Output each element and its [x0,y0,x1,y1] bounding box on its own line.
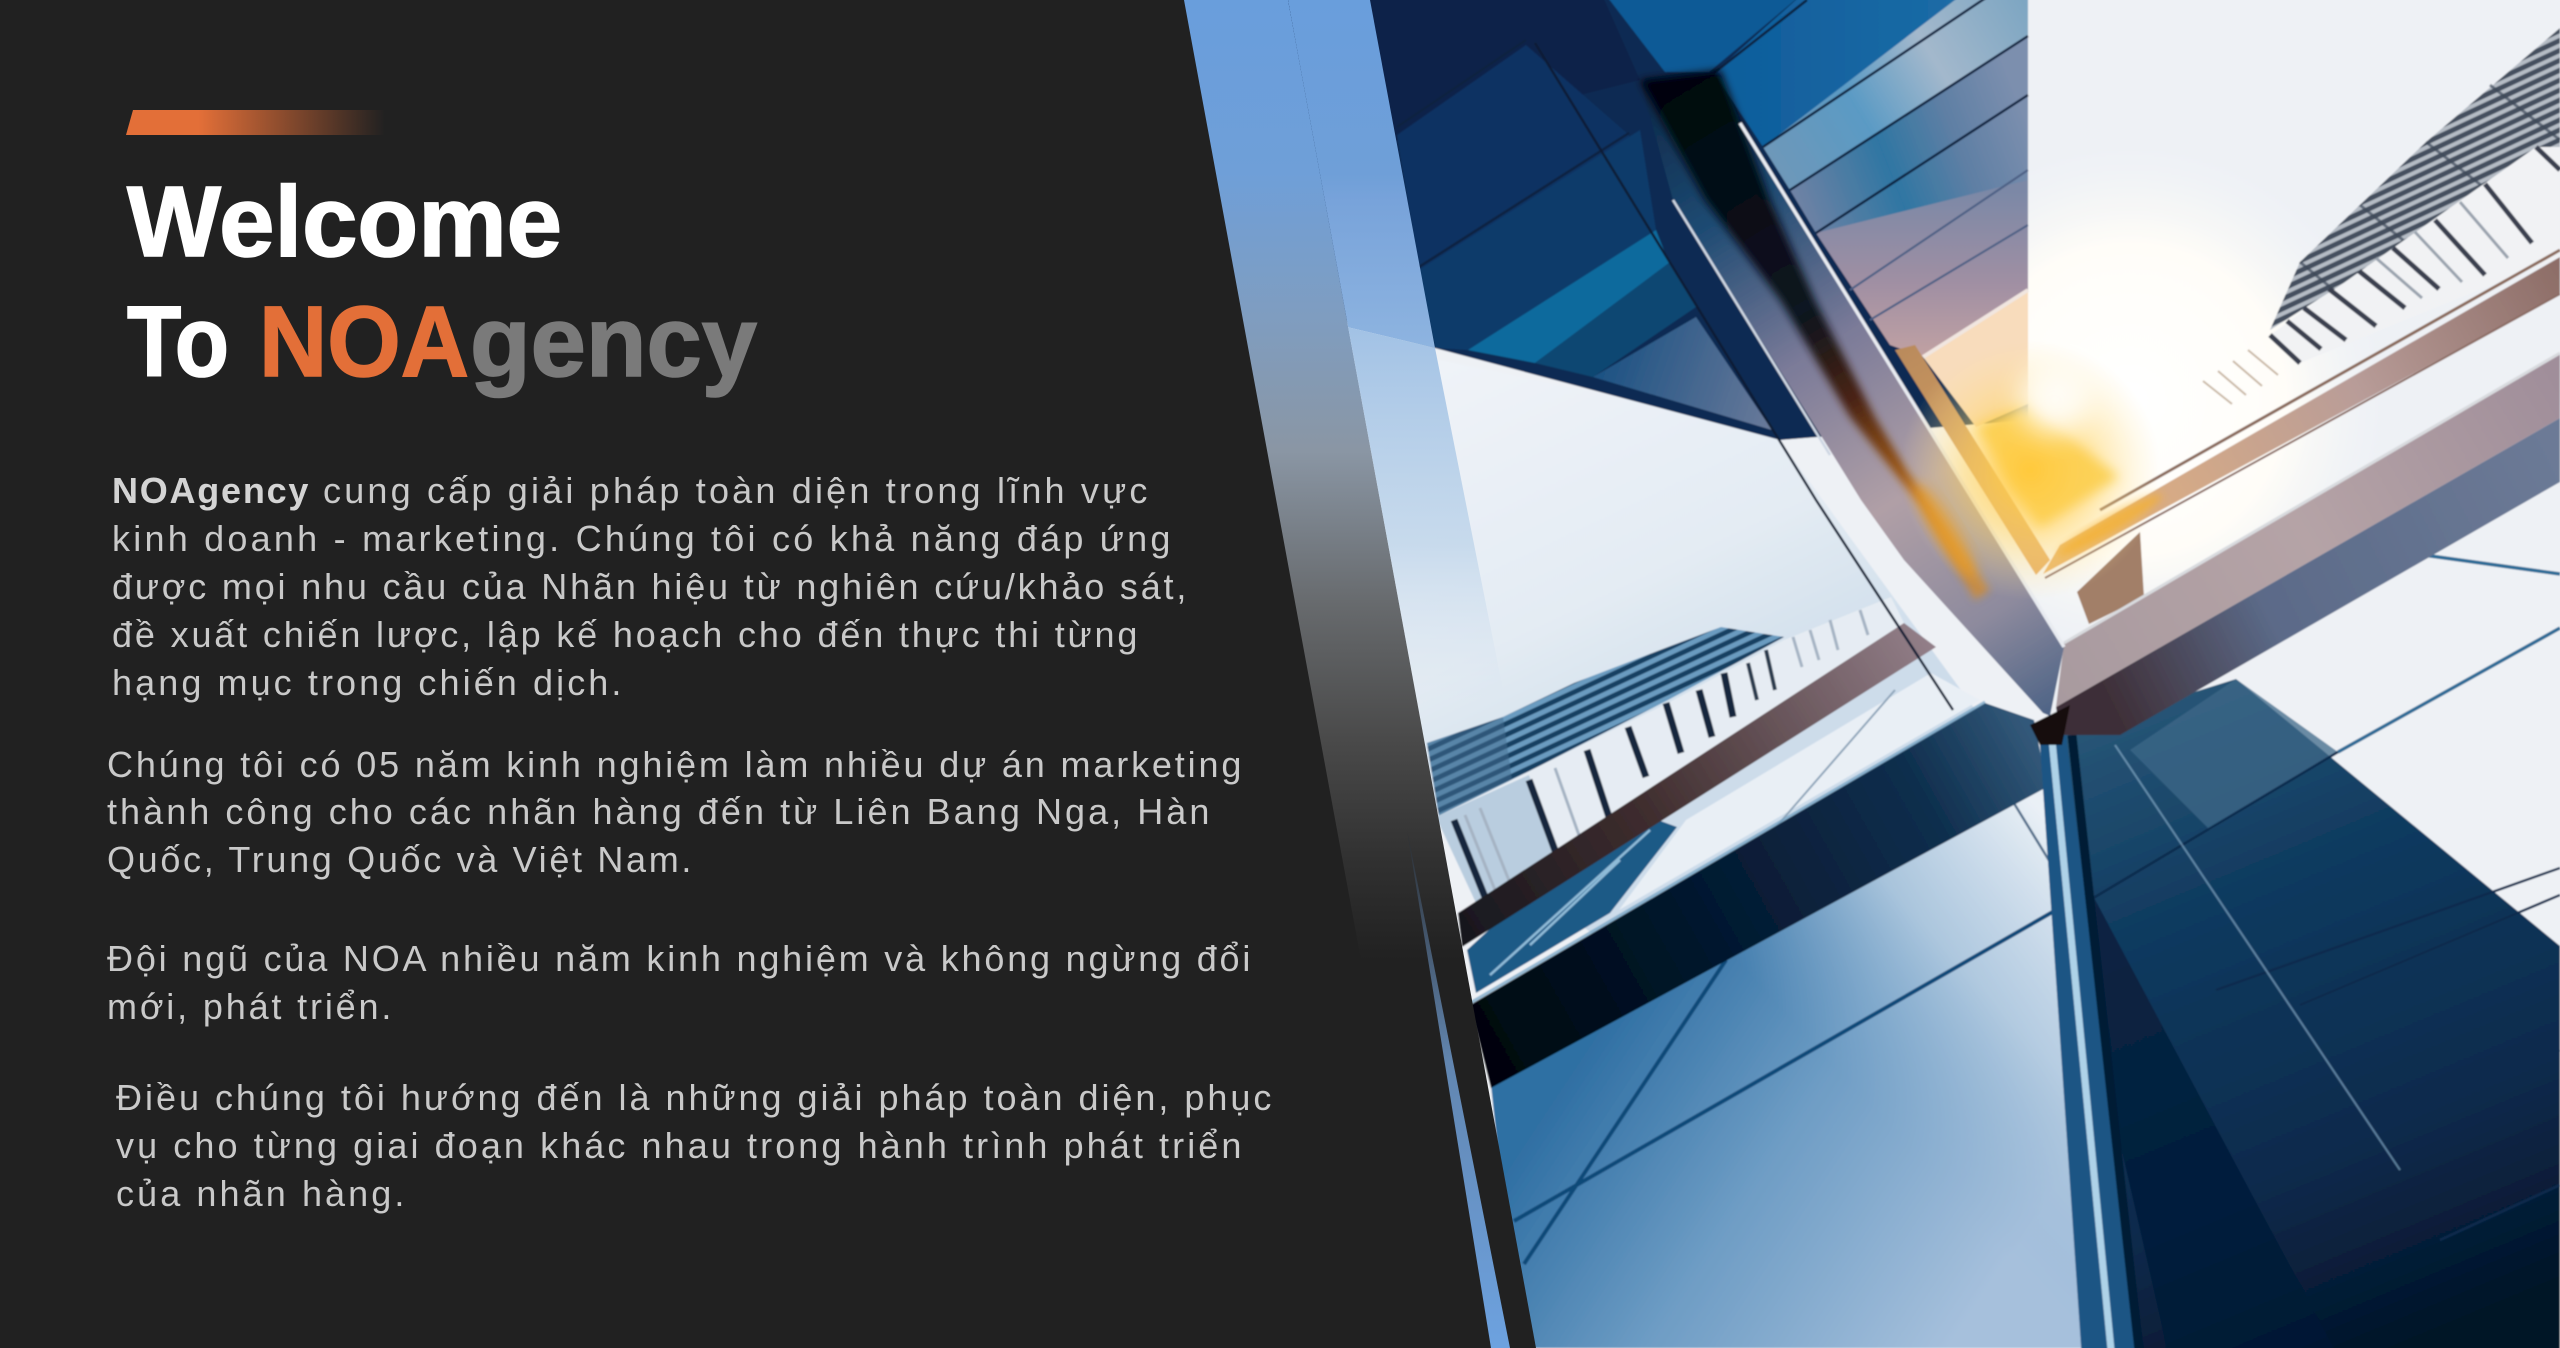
paragraph: experience [107,744,1242,880]
paragraph: goal: vụ cho từng giai đoạn khác nhau trong hành trình phát triển [116,1125,1242,1166]
lower glass panel [1491,787,2130,1348]
paragraph: goal: Điều chúng tôi hướng đến là những giải pháp toàn diện, phục [116,1077,1272,1118]
paragraph: about NOAgency: được mọi nhu cầu của Nhãn hiệu từ nghiên cứu/khảo sát, [112,566,1187,607]
title: gency [470,286,757,398]
title: To [127,286,229,398]
title [127,166,757,398]
paragraph: about NOAgency: cung cấp giải pháp toàn diện trong lĩnh vực [323,470,1148,511]
paragraph: experience: Quốc, Trung Quốc và Việt Nam. [107,839,692,880]
paragraph: about NOAgency: NOAgency [112,470,309,511]
upper left building [1270,0,2028,440]
title: Welcome [127,166,562,278]
lower right building [2056,679,2560,1348]
blue sliver accent [1407,830,1510,1348]
paragraph: about NOAgency: kinh doanh - marketing. Chúng tôi có khả năng đáp ứng [112,518,1171,559]
paragraph: about NOAgency [112,470,1187,703]
paragraph: team [107,938,1251,1027]
title: NOA [259,286,469,398]
paragraph: team: Đội ngũ của NOA nhiều năm kinh nghiệm và không ngừng đổi [107,938,1251,979]
paragraph: goal: của nhãn hàng. [116,1173,405,1214]
central beams [1535,43,2560,745]
paragraph: goal [116,1077,1272,1214]
paragraph: experience: thành công cho các nhãn hàng đến từ Liên Bang Nga, Hàn [107,791,1210,832]
light gap between beams [1619,673,1980,910]
paragraph: about NOAgency: đề xuất chiến lược, lập kế hoạch cho đến thực thi từng [112,614,1138,655]
right sky lines [2338,546,2560,752]
blue band overlay on photo [1288,0,1492,668]
paragraph: experience: Chúng tôi có 05 năm kinh nghiệm làm nhiều dự án marketing [107,744,1242,785]
lower left building [1427,597,1936,993]
paragraph: about NOAgency: hạng mục trong chiến dịch. [112,662,622,703]
photo: glass skyscrapers with sun flare [1260,0,2560,1348]
gradient diagonal band [1184,0,1540,1348]
dark diagonal beam [1470,703,2047,1088]
upper right building [2203,28,2560,404]
vertical mullion [2040,735,2140,1348]
paragraph: team: mới, phát triển. [107,986,392,1027]
sky [1260,0,2560,1348]
sun flare [1907,350,2164,592]
accent bar [126,110,385,135]
